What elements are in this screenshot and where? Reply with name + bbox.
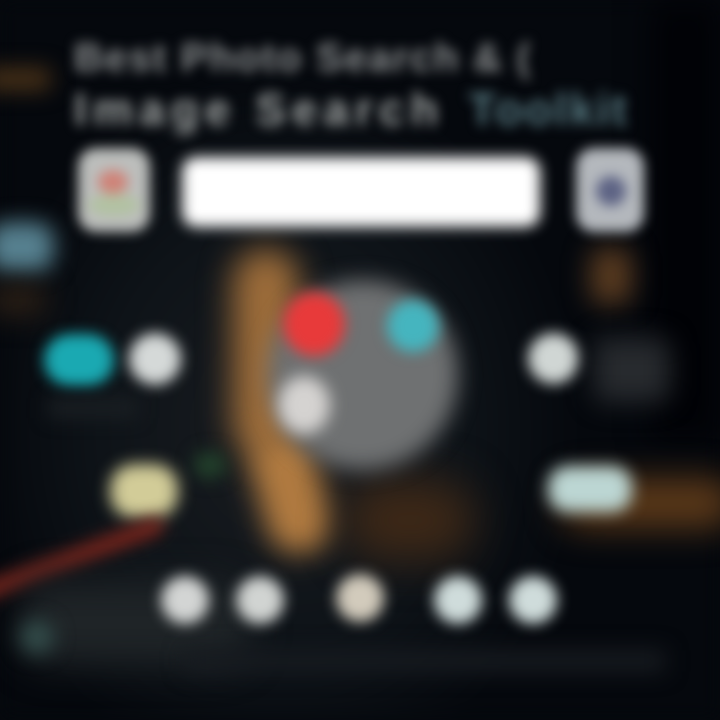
white circle left (129, 333, 181, 385)
white teal pill (548, 466, 632, 512)
title line 1: Best Photo Search & ( (74, 36, 532, 80)
teal circle (387, 300, 439, 352)
grey centre circle (268, 280, 458, 470)
blue blob left (0, 222, 54, 272)
yellow pill (110, 464, 178, 518)
bottom circle 5 (509, 576, 557, 624)
title (68, 36, 632, 142)
brown blob left (0, 285, 45, 315)
title line 2: Image Search Toolkit (74, 84, 629, 135)
red streak (0, 515, 167, 603)
caption left (48, 398, 138, 418)
teal blob bottom left (20, 620, 54, 654)
orange right lower (560, 478, 720, 528)
right dark edge (650, 0, 720, 440)
search bar (182, 157, 540, 227)
white circle (278, 376, 330, 434)
orange blob top left (0, 68, 50, 90)
icon: left app tile (78, 148, 150, 232)
bottom caption (185, 650, 665, 672)
red circle (283, 292, 345, 356)
icon: green part (88, 194, 140, 216)
bottom circle 4 (434, 576, 482, 624)
bottom circle 1 (161, 576, 209, 624)
teal pill (44, 334, 114, 386)
white circle right (528, 333, 579, 384)
green blob (194, 452, 226, 478)
orange vertical swath (232, 248, 300, 458)
icon: red part (98, 170, 128, 194)
grey lower left zone (20, 580, 250, 665)
brown lower centre (345, 480, 475, 560)
bottom circle 2 (236, 576, 284, 624)
grey block right (594, 338, 670, 402)
icon: blue centre (596, 176, 626, 206)
icon: right app tile (576, 148, 644, 232)
orange lower swath (242, 423, 340, 562)
orange blob right (590, 248, 632, 304)
bottom circle 3 (336, 574, 384, 622)
